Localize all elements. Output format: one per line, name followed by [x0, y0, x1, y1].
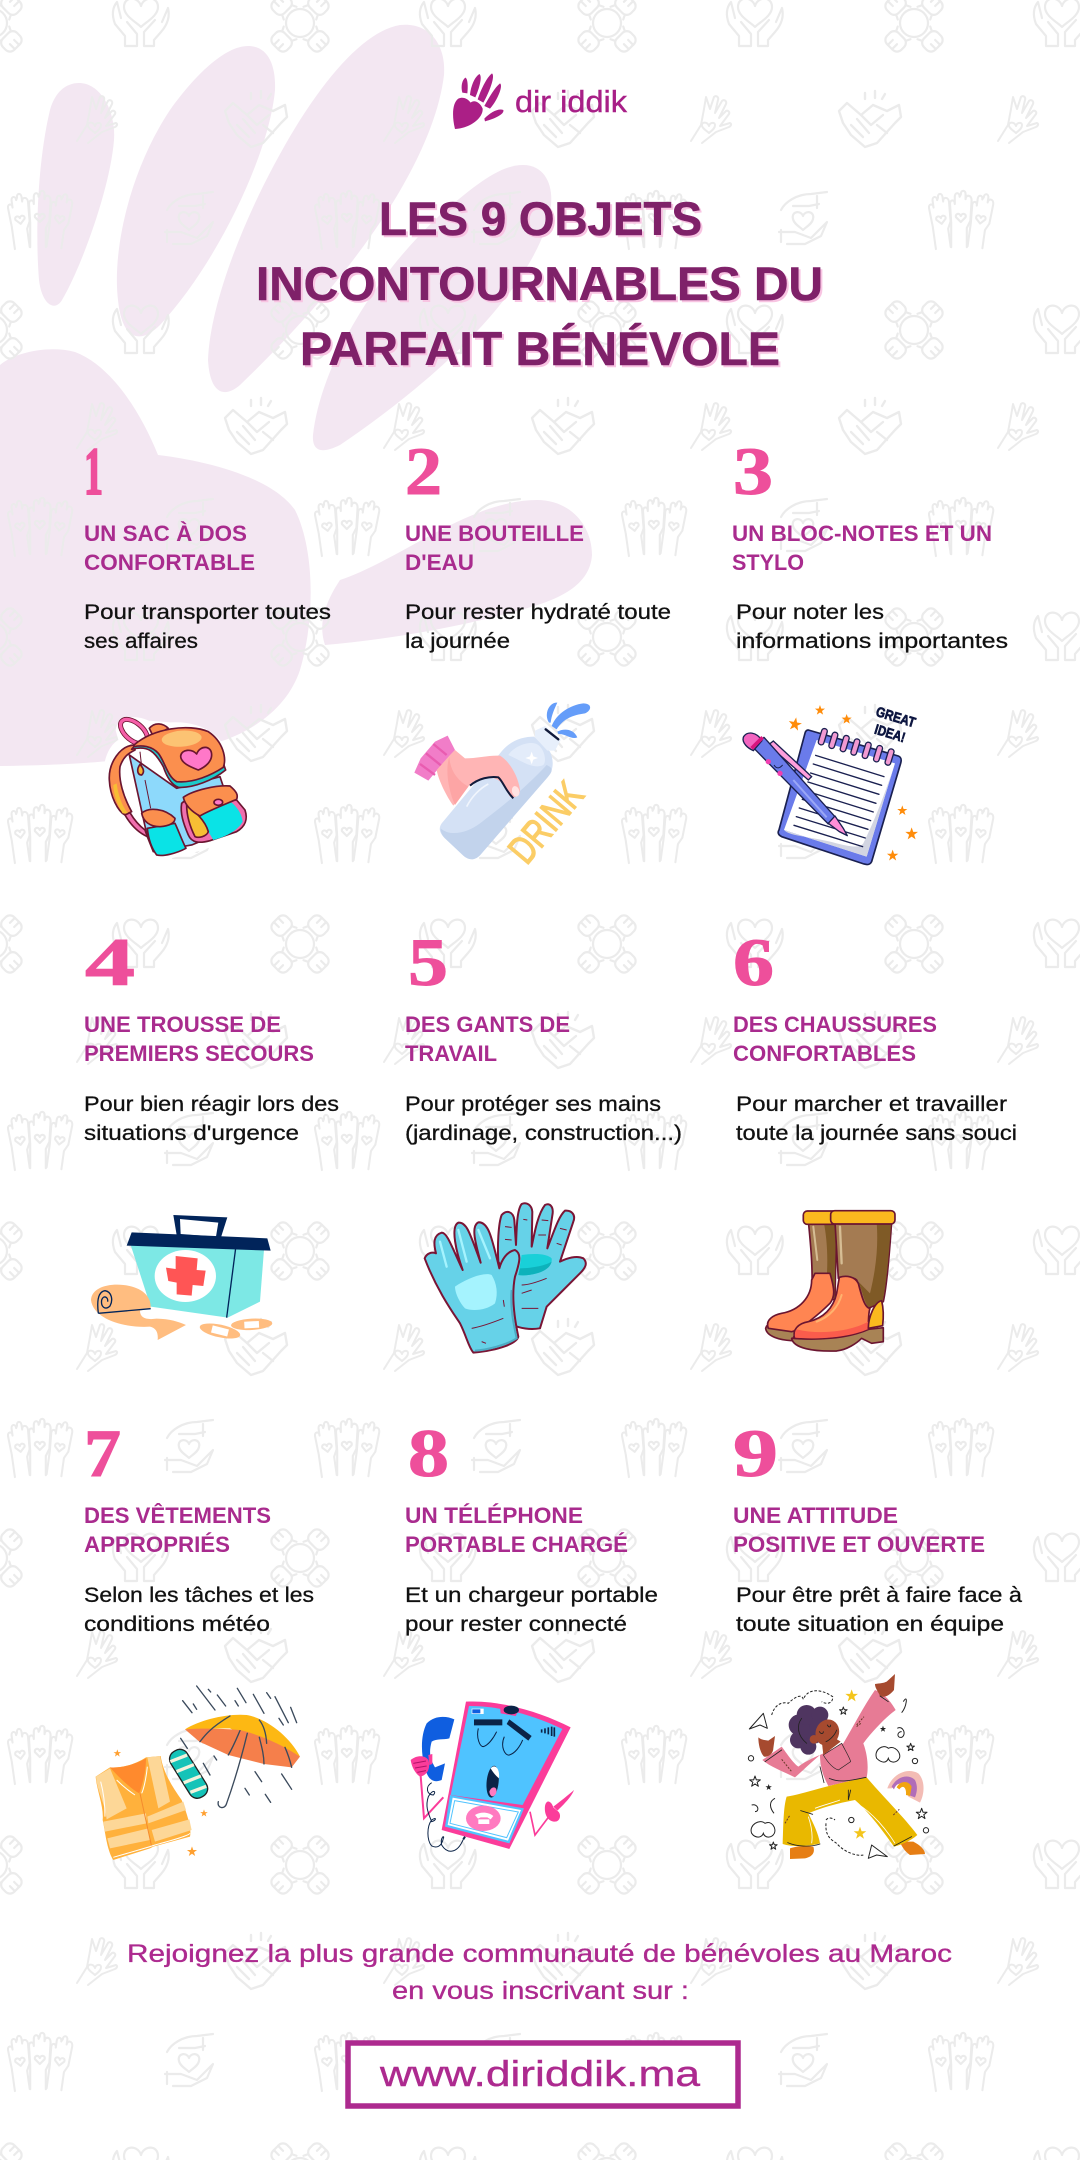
description 4: situations d'urgence — [84, 1121, 299, 1145]
heading 7 — [84, 1503, 271, 1557]
footer: call to action text — [127, 1940, 952, 2005]
heading 8: PORTABLE CHARGÉ — [405, 1532, 628, 1557]
panel: item 3 notepad and pen — [732, 433, 1008, 865]
description 6: toute la journée sans souci — [736, 1121, 1017, 1145]
description 8 — [405, 1583, 658, 1636]
heading 1: CONFORTABLE — [84, 550, 255, 575]
description 3: informations importantes — [736, 629, 1008, 653]
description 1: Pour transporter toutes — [84, 600, 331, 624]
panel: item 7 appropriate clothing — [84, 1415, 314, 1860]
heading 6: CONFORTABLES — [733, 1041, 916, 1066]
title: PARFAIT BÉNÉVOLE — [300, 322, 780, 376]
description 2 — [405, 600, 671, 653]
number 2: 2 — [405, 433, 442, 509]
panel: item 9 positive attitude — [733, 1415, 1022, 1859]
description 3: Pour noter les — [736, 600, 884, 624]
heading 3 — [732, 521, 992, 575]
heading 2: D'EAU — [405, 550, 474, 575]
heading 5: DES GANTS DE — [405, 1012, 570, 1037]
number 5: 5 — [408, 924, 448, 1000]
footer: website box: www.diriddik.ma — [379, 2053, 701, 2094]
logo: dir iddik — [453, 73, 628, 129]
icon: hand holding bottle — [414, 703, 592, 872]
icon: hand holding bottle: DRINK — [500, 773, 592, 872]
heading 9: POSITIVE ET OUVERTE — [733, 1532, 985, 1557]
description 9: Pour être prêt à faire face à — [736, 1583, 1022, 1607]
heading 6: DES CHAUSSURES — [733, 1012, 937, 1037]
icon: first aid kit — [91, 1215, 273, 1341]
heading 8 — [405, 1503, 628, 1557]
heading 8: UN TÉLÉPHONE — [405, 1503, 583, 1528]
description 7: conditions météo — [84, 1612, 270, 1636]
description 5: Pour protéger ses mains — [405, 1092, 661, 1116]
description 6 — [736, 1092, 1017, 1145]
description 1: ses affaires — [84, 629, 198, 653]
description 1 — [84, 600, 331, 653]
icon: logo hand with heart — [453, 73, 503, 129]
number 8: 8 — [408, 1415, 449, 1491]
heading 4 — [84, 1012, 314, 1066]
footer: website box — [348, 2043, 738, 2106]
title: INCONTOURNABLES DU — [256, 258, 823, 311]
heading 9: UNE ATTITUDE — [733, 1503, 898, 1528]
description 7: Selon les tâches et les — [84, 1583, 314, 1607]
number 4: 4 — [85, 924, 135, 1000]
heading 5: TRAVAIL — [405, 1041, 497, 1066]
description 5: (jardinage, construction...) — [405, 1121, 682, 1145]
description 8: pour rester connecté — [405, 1612, 627, 1636]
icon: notepad and pen: GREAT — [874, 703, 918, 731]
icon: notepad and pen — [743, 703, 918, 865]
logo wordmark: dir iddik — [515, 84, 628, 119]
number 6: 6 — [733, 924, 774, 1000]
description 4 — [84, 1092, 339, 1145]
icon: dancing person with doodles — [748, 1674, 929, 1859]
footer: call to action text: Rejoignez la plus grande communauté de bénévoles au Maroc — [127, 1940, 952, 1968]
description 2: Pour rester hydraté toute — [405, 600, 671, 624]
heading 7: DES VÊTEMENTS — [84, 1503, 271, 1528]
heading 2 — [405, 521, 584, 575]
icon: notepad and pen: IDEA! — [873, 721, 907, 745]
heading 4: UNE TROUSSE DE — [84, 1012, 281, 1037]
heading 2: UNE BOUTEILLE — [405, 521, 584, 546]
panel: item 2 water bottle — [405, 433, 671, 872]
footer: call to action text: en vous inscrivant sur : — [392, 1977, 689, 2005]
description 5 — [405, 1092, 682, 1145]
background: large pale hand silhouette — [0, 25, 592, 766]
heading 3: UN BLOC-NOTES ET UN — [732, 521, 992, 546]
heading 5 — [405, 1012, 570, 1066]
number 1: 1 — [84, 433, 103, 509]
panel: item 1 backpack — [84, 433, 331, 858]
number 3: 3 — [733, 433, 773, 509]
heading 1: UN SAC À DOS — [84, 521, 247, 546]
panel: item 5 work gloves — [405, 924, 682, 1353]
icon: backpack — [107, 715, 248, 858]
heading 4: PREMIERS SECOURS — [84, 1041, 314, 1066]
title — [256, 193, 823, 376]
heading 3: STYLO — [732, 550, 804, 575]
panel: item 6 boots — [733, 924, 1017, 1351]
title: LES 9 OBJETS — [379, 193, 702, 246]
heading 6 — [733, 1012, 937, 1066]
description 2: la journée — [405, 629, 510, 653]
description 8: Et un chargeur portable — [405, 1583, 658, 1607]
description 9 — [736, 1583, 1022, 1636]
description 7 — [84, 1583, 314, 1636]
number 9: 9 — [733, 1415, 778, 1491]
description 3 — [736, 600, 1008, 653]
icon: vest, goggles and umbrella — [96, 1686, 300, 1860]
number 7: 7 — [84, 1415, 121, 1491]
heading 7: APPROPRIÉS — [84, 1532, 230, 1557]
description 4: Pour bien réagir lors des — [84, 1092, 339, 1116]
icon: phone character — [411, 1702, 574, 1851]
panel: item 8 charged phone — [405, 1415, 658, 1851]
heading 1 — [84, 521, 255, 575]
icon: rain boots — [766, 1211, 895, 1351]
description 6: Pour marcher et travailler — [736, 1092, 1007, 1116]
icon: gloves — [425, 1203, 586, 1353]
panel: item 4 first aid kit — [84, 924, 339, 1341]
description 9: toute situation en équipe — [736, 1612, 1004, 1636]
heading 9 — [733, 1503, 985, 1557]
